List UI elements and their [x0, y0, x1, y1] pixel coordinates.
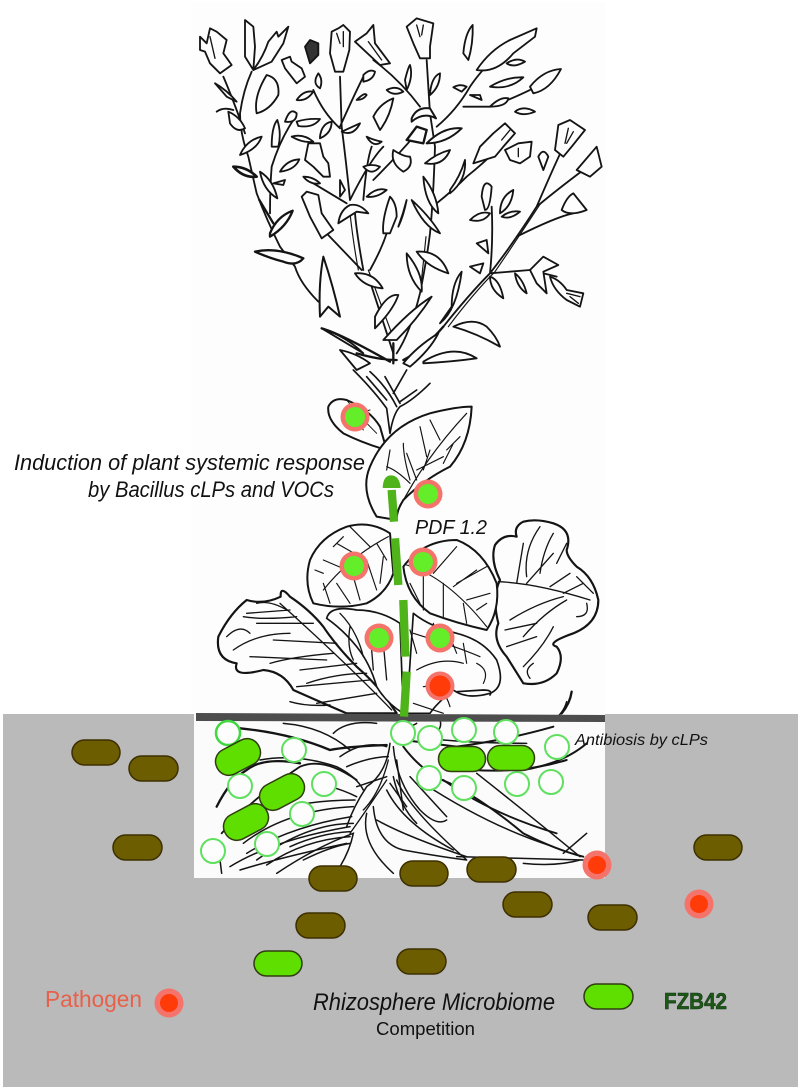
text: FZB42 legend: FZB42 — [664, 988, 727, 1014]
leaf induced-response markers — [340, 402, 454, 652]
text: plant systemic response heading — [14, 450, 365, 502]
panel: soil rhizosphere background — [3, 714, 798, 1087]
text: PDF 1.2 label: PDF 1.2 — [415, 517, 487, 539]
text: antibiosis label: Antibiosis by cLPs — [574, 732, 708, 749]
text: Rhizosphere Microbiome: Rhizosphere Microbiome — [313, 989, 555, 1016]
arrow: systemic signal up the stem — [383, 476, 407, 717]
panel: root illustration background — [194, 714, 605, 878]
text: Pathogen legend: Pathogen — [45, 986, 142, 1012]
text: plant systemic response heading: Induction of plant systemic response — [14, 450, 365, 475]
panel: plant illustration background — [191, 2, 605, 714]
white antibiosis circles around roots — [201, 718, 569, 863]
text: Competition: Competition — [376, 1019, 475, 1039]
divider: soil line — [196, 713, 605, 722]
text: plant systemic response heading: by Bacillus cLPs and VOCs — [88, 477, 334, 502]
pathogens — [154, 672, 714, 1018]
illustration: plant roots — [217, 702, 587, 873]
native microbiome bacteria — [72, 740, 742, 974]
FZB42 bacteria — [211, 734, 633, 1009]
illustration: upper plant branches and flowers — [200, 18, 602, 370]
illustration: large lower leaves — [218, 370, 598, 713]
